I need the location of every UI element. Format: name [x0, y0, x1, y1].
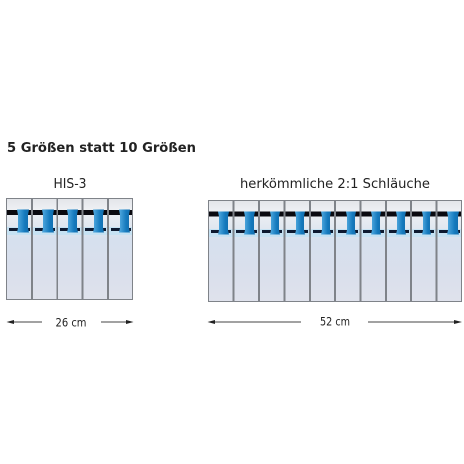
- box 5: [311, 201, 334, 301]
- box 2: [33, 199, 56, 299]
- box 7: [362, 201, 385, 301]
- panel: HIS-3 tube boxes: [6, 198, 133, 300]
- box 2: [234, 201, 258, 301]
- box 4: [84, 199, 107, 299]
- arrow: 26 cm left: [6, 320, 42, 324]
- dimension label: 26 cm: 26 cm: [56, 316, 86, 330]
- box 1: [209, 201, 232, 301]
- panel: conventional tube boxes: [208, 200, 462, 302]
- dimension label: 52 cm: 52 cm: [320, 314, 350, 328]
- box 10: [438, 201, 461, 301]
- box 9: [412, 201, 436, 301]
- heading: HIS-3: HIS-3: [54, 177, 86, 192]
- box 6: [336, 201, 360, 301]
- arrow: 52 cm right: [368, 320, 462, 324]
- box 4: [286, 201, 309, 301]
- arrow: 52 cm left: [208, 320, 301, 324]
- box 8: [387, 201, 410, 301]
- box 3: [260, 201, 284, 301]
- arrow: 26 cm right: [101, 320, 134, 324]
- heading: herkömmliche 2:1 Schläuche: herkömmliche 2:1 Schläuche: [240, 177, 430, 192]
- box 1: [7, 199, 31, 299]
- box 5: [109, 199, 132, 299]
- box 3: [58, 199, 82, 299]
- title: 5 Größen statt 10 Größen: [7, 140, 196, 156]
